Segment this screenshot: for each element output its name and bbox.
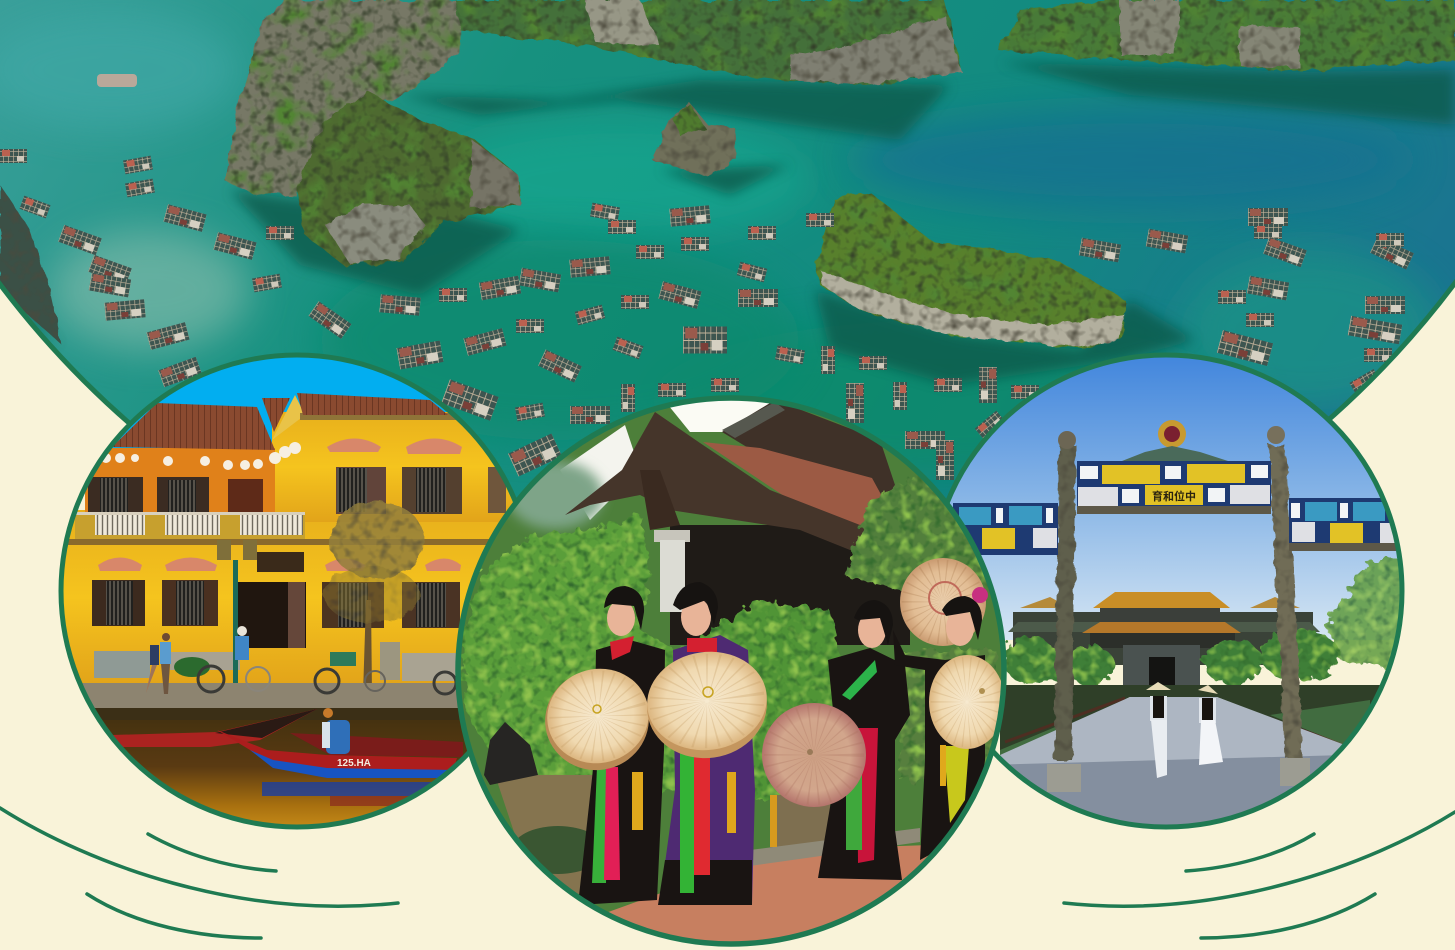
wall base (94, 642, 458, 681)
backdrop (455, 395, 1010, 950)
singer two (658, 582, 755, 905)
photo border (0, 0, 1455, 647)
crouching person (484, 722, 538, 785)
lanterns (101, 442, 301, 470)
boats (112, 708, 463, 778)
panel: Quan ho folk singers photo (455, 395, 1010, 950)
karst island right (815, 192, 1125, 348)
panel: Hoi An old town photo (50, 350, 540, 838)
decorative curves left (0, 808, 398, 938)
temple gable roof (565, 412, 895, 560)
gate crest (1122, 420, 1228, 461)
photo border (930, 355, 1402, 827)
singer one (578, 586, 665, 905)
karst island top left (224, 0, 462, 195)
upper windows (88, 467, 506, 514)
palace (1008, 592, 1320, 692)
panel: Hue imperial gate photo (930, 350, 1410, 830)
people and cyclos (146, 626, 456, 694)
island reflections (0, 62, 1455, 385)
gate pillars (1047, 426, 1310, 792)
karst islet centre (652, 103, 738, 176)
foliage (462, 470, 1000, 800)
conical hats (534, 644, 1005, 807)
decorative curves right (1064, 812, 1455, 938)
gate left wing (953, 503, 1058, 555)
stone pillar (640, 470, 690, 612)
sky (930, 350, 1410, 640)
karst left edge (0, 185, 62, 345)
photo border (458, 398, 1004, 944)
lamp post (217, 540, 257, 695)
lower windows and door (92, 552, 460, 648)
pond and railings (1000, 685, 1380, 760)
panel: Ha Long Bay photo (0, 0, 1455, 499)
water (0, 0, 1455, 499)
trees (1004, 630, 1340, 685)
karst island front (297, 92, 520, 266)
karst range top centre (455, 0, 962, 85)
sky (112, 358, 447, 448)
temple building (670, 400, 910, 645)
floating fish farm rafts (0, 74, 1414, 480)
tree top right (1325, 560, 1410, 670)
arches (98, 438, 462, 571)
yellow house (60, 395, 532, 685)
tree (324, 502, 425, 695)
raised conical hat (900, 558, 986, 646)
singer four (893, 587, 988, 860)
photo border (61, 355, 533, 827)
singer three (818, 600, 910, 880)
women in ao dai (1146, 682, 1223, 778)
karst range top right (998, 0, 1455, 70)
gate top beam (1077, 461, 1271, 514)
roofs (112, 393, 448, 450)
gate top beam: 育和位中 (1152, 489, 1196, 503)
balcony (75, 512, 305, 539)
river (102, 720, 467, 824)
ground (495, 775, 930, 950)
bridge (1000, 697, 1342, 824)
street (82, 683, 458, 708)
boats: 125.HA (337, 758, 371, 769)
gate right wing (1289, 498, 1397, 551)
